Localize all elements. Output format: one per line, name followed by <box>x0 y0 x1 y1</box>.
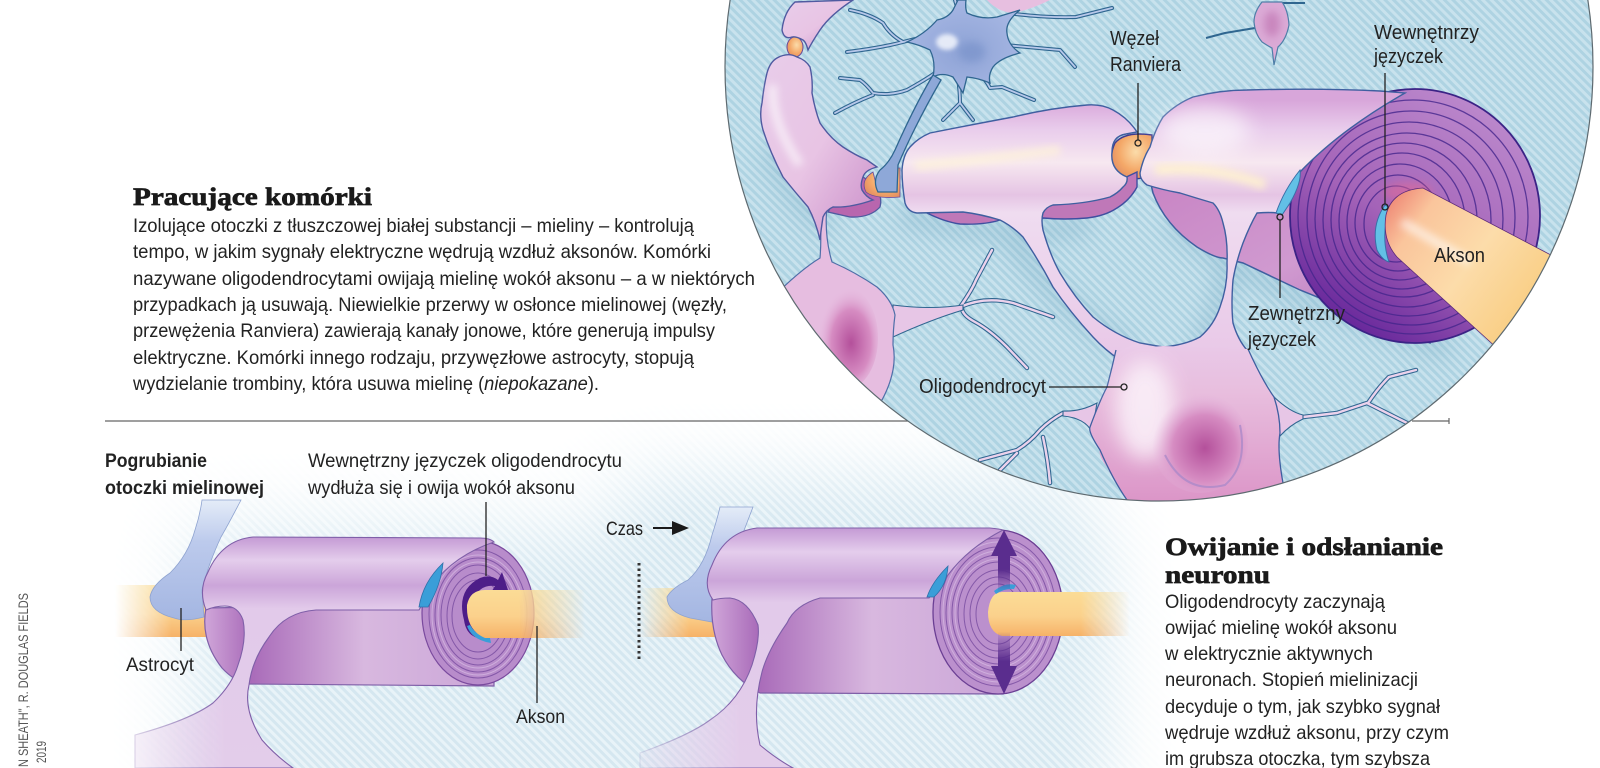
paragraph: przewężenia Ranviera) zawierają kanały jonowe, które generują impulsy <box>133 320 715 342</box>
label: node of Ranvier: Węzeł <box>1110 28 1159 50</box>
circle outline <box>725 0 1593 501</box>
node of Ranvier <box>1112 134 1152 179</box>
note: inner tongue <box>307 450 622 576</box>
paragraph: Oligodendrocyty zaczynają <box>1165 591 1385 613</box>
heading: thickening: otoczki mielinowej <box>105 478 264 499</box>
label: outer tongue: Zewnętrzny <box>1248 303 1345 325</box>
upper left myelin segments and nodes <box>761 0 941 240</box>
top illustration labels <box>919 22 1485 398</box>
axon <box>640 588 715 637</box>
central myelin segment underside <box>927 172 1137 224</box>
note: inner tongue: Wewnętrzny języczek oligodendrocytu <box>308 450 622 472</box>
heading: thickening: Pogrubianie <box>105 451 207 472</box>
inner tongue <box>994 584 1016 594</box>
axon end <box>467 590 590 638</box>
myelin surface with process <box>135 537 494 768</box>
large axon <box>1384 188 1550 344</box>
paragraph: Izolujące otoczki z tłuszczowej białej substancji – mieliny – kontrolują <box>133 215 694 237</box>
myelin disc with concentric rings <box>1290 89 1540 343</box>
paragraph: przypadkach ją usuwają. Niewielkie przerwy w osłonce mielinowej (węzły, <box>133 294 727 316</box>
axon <box>988 592 1135 636</box>
time arrow: Czas <box>606 518 643 540</box>
text block: wrapping and unwrapping <box>1164 534 1449 768</box>
large myelin underside <box>1150 180 1440 343</box>
paragraph: nazywane oligodendrocytami owijają mielinę wokół aksonu – a w niektórych <box>133 268 755 290</box>
hatched glow behind lower illustrations <box>159 448 1138 768</box>
myelin disc <box>422 541 534 685</box>
paragraph: neuronach. Stopień mielinizacji <box>1165 669 1418 691</box>
outer tongue <box>419 563 443 607</box>
label: axon: Akson <box>516 706 565 728</box>
paragraph: wydzielanie trombiny, która usuwa mielinę (niepokazane). <box>132 373 599 395</box>
heading: neuronu <box>1165 562 1270 589</box>
astrocyte <box>150 500 241 620</box>
inner tongue <box>1375 205 1390 262</box>
label: oligodendrocyte: Oligodendrocyt <box>919 376 1046 398</box>
label: outer tongue: języczek <box>1247 329 1317 351</box>
labels for first stage <box>105 450 622 728</box>
paragraph: w elektrycznie aktywnych <box>1164 643 1373 665</box>
myelin disc <box>933 530 1063 694</box>
label: axon: Akson <box>1434 245 1485 267</box>
main oligodendrocyte cell body <box>978 346 1418 500</box>
circle background <box>725 0 1593 501</box>
outer tongue <box>1276 170 1300 215</box>
astrocyte (blue cell) <box>835 0 1112 120</box>
paragraph: owijać mielinę wokół aksonu <box>1165 617 1397 639</box>
heading: Pracujące komórki <box>133 184 372 211</box>
circular magnified illustration <box>725 0 1593 520</box>
large myelin surface with process <box>1140 89 1405 360</box>
paragraph <box>132 215 755 395</box>
growth arrow <box>991 530 1017 694</box>
left oligodendrocyte cell <box>784 212 1056 400</box>
vertical credit <box>16 593 49 767</box>
label: axon <box>516 626 565 728</box>
myelin lower body <box>712 590 1003 694</box>
label: inner tongue: języczek <box>1373 46 1444 68</box>
paragraph: wędruje wzdłuż aksonu, przy czym <box>1164 722 1449 744</box>
label: astrocyte <box>126 608 195 676</box>
label: node of Ranvier <box>1110 28 1182 146</box>
divider line <box>105 418 1449 424</box>
illustration: thickening, second stage <box>640 507 1135 768</box>
highlight on large surface <box>1160 106 1250 154</box>
label: astrocyte: Astrocyt <box>126 654 195 676</box>
note: inner tongue: wydłuża się i owija wokół aksonu <box>307 477 575 499</box>
highlight on central segment <box>915 150 1060 166</box>
label: outer tongue <box>1247 214 1345 351</box>
label: node of Ranvier: Ranviera <box>1110 54 1182 76</box>
vertical credit: N SHEATH", R. DOUGLAS FIELDS <box>16 593 31 767</box>
dotted separator <box>638 563 640 660</box>
astrocyte <box>667 507 753 622</box>
text block: working cells <box>132 184 755 395</box>
heading: thickening <box>105 451 264 499</box>
time arrow <box>606 518 689 540</box>
paragraph: elektryczne. Komórki innego rodzaju, przywęzłowe astrocyty, stopują <box>133 347 694 369</box>
label: oligodendrocyte <box>919 376 1127 398</box>
central myelin segment with process <box>902 105 1163 360</box>
heading: Owijanie i odsłanianie <box>1165 534 1443 561</box>
paragraph: decyduje o tym, jak szybko sygnał <box>1165 696 1441 718</box>
myelin lower body <box>205 600 494 686</box>
label: inner tongue <box>1373 22 1479 210</box>
outer tongue <box>927 566 948 597</box>
illustration: thickening, first stage <box>110 500 590 768</box>
heading <box>1165 534 1443 589</box>
myelin surface with process <box>640 528 1003 768</box>
paragraph: tempo, w jakim sygnały elektryczne wędrują wzdłuż aksonów. Komórki <box>133 241 711 263</box>
vertical credit: 2019 <box>34 741 49 763</box>
small purple cell at top <box>987 0 1305 65</box>
axon <box>118 585 206 637</box>
paragraph <box>1164 591 1449 768</box>
label: inner tongue: Wewnętnrzy <box>1374 22 1479 44</box>
